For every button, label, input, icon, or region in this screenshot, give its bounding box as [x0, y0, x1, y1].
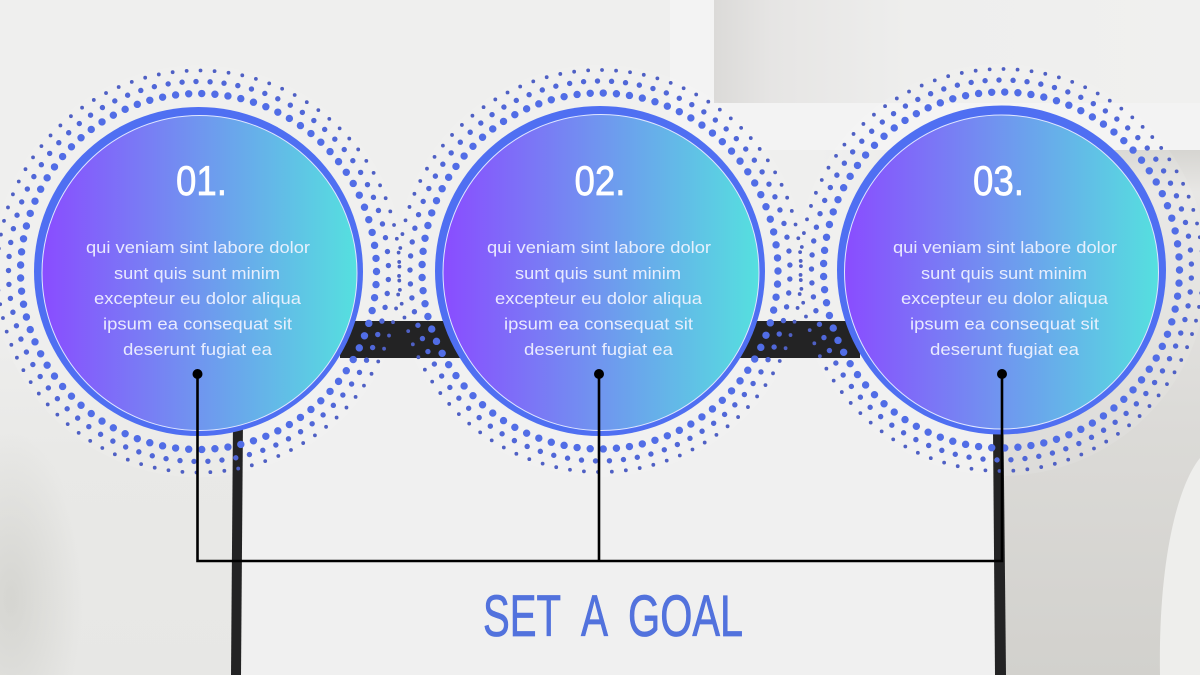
- table leg left: [231, 420, 243, 675]
- step 1 text: deserunt fugiat ea: [123, 340, 273, 359]
- step 1 text: qui veniam sint labore dolor: [86, 238, 310, 257]
- table top: [340, 321, 860, 358]
- step 2 text: [487, 238, 711, 359]
- panel: step 1: [34, 107, 363, 436]
- dot halos: [0, 64, 1200, 478]
- step 2 text: excepteur eu dolor aliqua: [495, 289, 703, 308]
- step 2 text: sunt quis sunt minim: [515, 264, 681, 283]
- step 3 text: deserunt fugiat ea: [930, 340, 1080, 359]
- dotted ring 2: [394, 65, 806, 477]
- lamp base: [1160, 458, 1200, 675]
- dotted ring 3: [796, 64, 1200, 476]
- step 3 number: 03.: [973, 157, 1024, 204]
- table leg right: [993, 430, 1006, 675]
- step 1 text: sunt quis sunt minim: [114, 264, 280, 283]
- panel: step 3: [837, 106, 1166, 434]
- step 1 number: 01.: [176, 157, 227, 204]
- step 3 text: qui veniam sint labore dolor: [893, 238, 1117, 257]
- step 2 text: qui veniam sint labore dolor: [487, 238, 711, 257]
- step 1 text: [86, 238, 310, 359]
- step 1 text: excepteur eu dolor aliqua: [94, 289, 302, 308]
- step 2 text: deserunt fugiat ea: [524, 340, 674, 359]
- dotted ring 1: [0, 66, 404, 477]
- step 2 text: ipsum ea consequat sit: [504, 314, 693, 334]
- heading: SET: [483, 584, 561, 649]
- heading: GOAL: [628, 584, 743, 649]
- heading: A: [581, 584, 608, 649]
- step 3 text: [893, 238, 1117, 359]
- step 1 text: ipsum ea consequat sit: [103, 314, 292, 334]
- panel: step 2: [435, 106, 765, 436]
- connector lines: [192, 369, 1007, 561]
- step 3 text: sunt quis sunt minim: [921, 264, 1087, 283]
- step 2 number: 02.: [574, 157, 626, 204]
- heading: [483, 584, 743, 649]
- step 3 text: excepteur eu dolor aliqua: [901, 289, 1109, 308]
- step 3 text: ipsum ea consequat sit: [910, 314, 1099, 334]
